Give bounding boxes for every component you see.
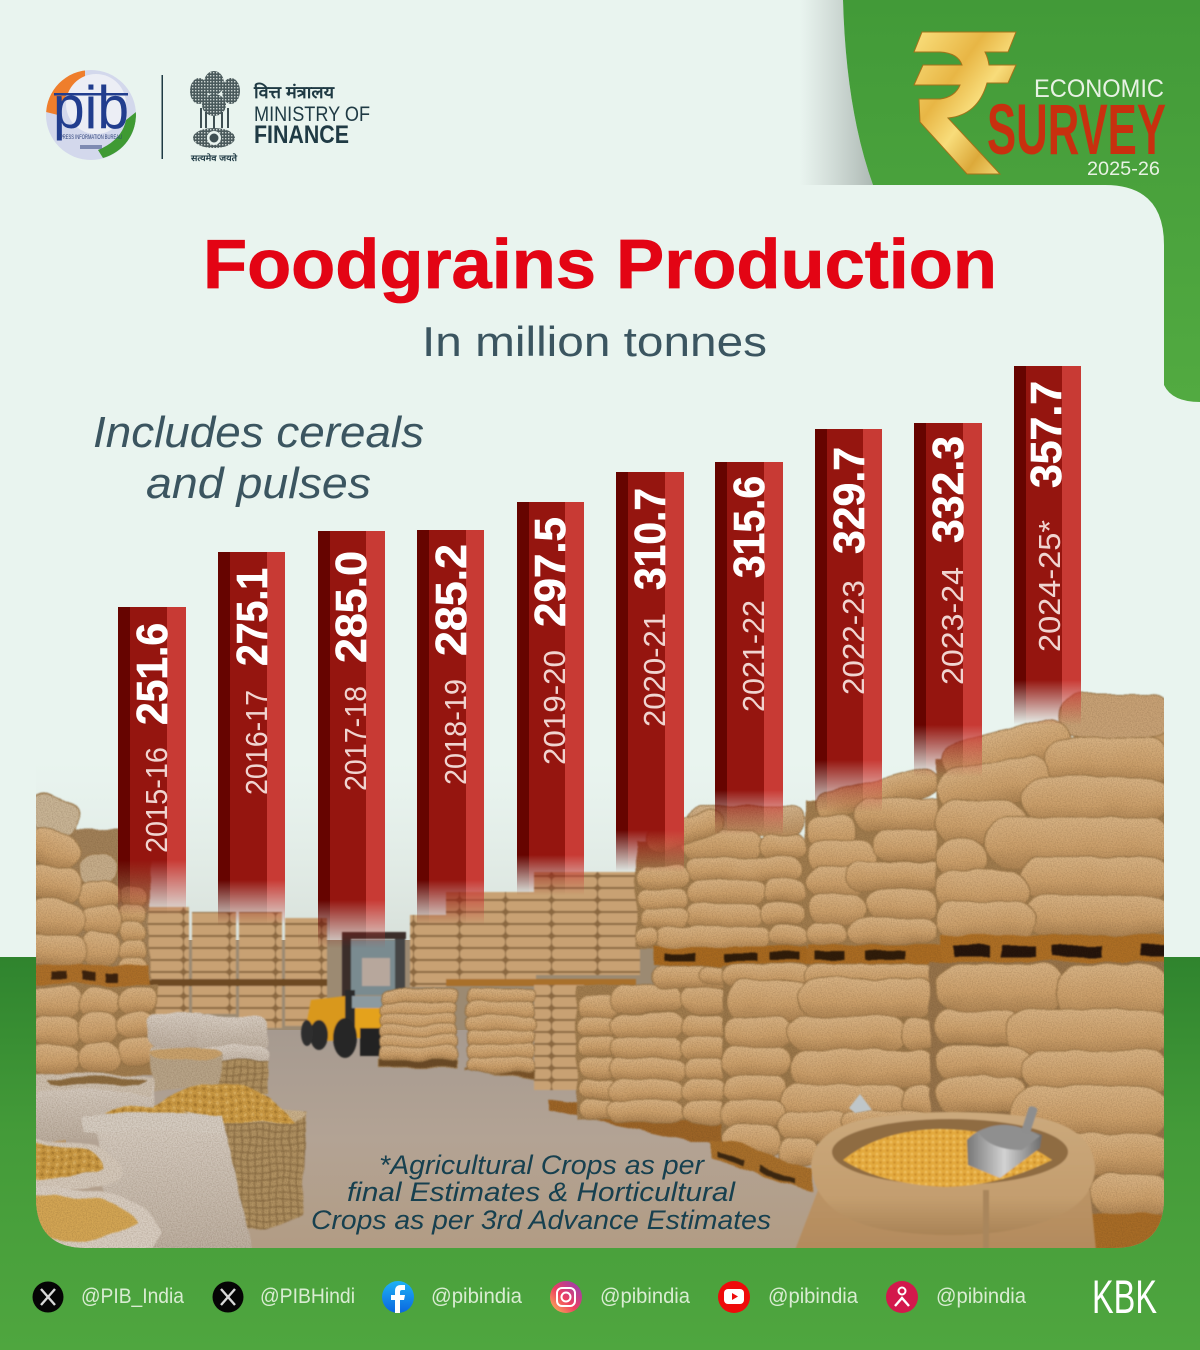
- sack underlay right: [1130, 730, 1164, 1248]
- left big stack: [21, 788, 150, 980]
- bar chart: [118, 366, 1081, 961]
- national emblem: सत्यमेव जयते: [190, 153, 238, 163]
- sack underlay left: [36, 1140, 66, 1246]
- ministry name: FINANCE: [254, 121, 349, 149]
- warehouse photo: [21, 694, 1172, 1256]
- bar values: 332.3: [924, 436, 973, 543]
- bar year labels: 2023-24: [935, 567, 970, 685]
- koo icon: [886, 1281, 918, 1313]
- bar year labels: 2017-18: [338, 686, 373, 791]
- PIB logo: [46, 70, 136, 160]
- bar year labels: 2020-21: [637, 613, 672, 727]
- bottom right pallet: [1091, 1215, 1171, 1251]
- footnote: Crops as per 3rd Advance Estimates: [311, 1205, 771, 1235]
- logo divider: [162, 75, 163, 159]
- side note: and pulses: [146, 459, 371, 508]
- footnote: *Agricultural Crops as per: [379, 1150, 705, 1180]
- stack A lower: [930, 962, 1170, 1222]
- instagram icon: [550, 1281, 582, 1313]
- social handles: @PIBHindi: [260, 1285, 355, 1308]
- footnote: [311, 1150, 771, 1235]
- PIB logo: pib: [53, 74, 129, 141]
- basket with grain: [150, 1084, 307, 1230]
- social handles: [81, 1285, 1026, 1308]
- big front sack with grain and scoop: [795, 1094, 1096, 1250]
- bar values: 285.2: [427, 544, 476, 656]
- wall haze: [150, 853, 635, 940]
- stack beside forklift: [380, 990, 457, 1067]
- grey sacks: [146, 1014, 268, 1094]
- ministry name: MINISTRY OF: [254, 103, 370, 126]
- ministry name: वित्त मंत्रालय: [253, 82, 335, 102]
- left pallet: [30, 965, 148, 985]
- rupee symbol: [914, 32, 1016, 174]
- back right small stacks: [410, 872, 640, 1090]
- white sack with grain: [80, 1106, 252, 1256]
- stack B lower: [722, 964, 936, 1166]
- bar year labels: 2022-23: [836, 580, 871, 695]
- PIB logo: PRESS INFORMATION BUREAU: [60, 134, 122, 141]
- facebook icon: [382, 1281, 414, 1313]
- pallet below front centre stack: [548, 1100, 725, 1142]
- bar year labels: 2018-19: [438, 679, 473, 785]
- pallet A: [940, 935, 1170, 962]
- tab shadow: [812, 0, 873, 185]
- pallet front B: [711, 1140, 812, 1192]
- bar year labels: 2021-22: [736, 600, 771, 712]
- bar values: 310.7: [626, 488, 675, 590]
- far stacks: [146, 907, 327, 1028]
- economic survey badge: [914, 32, 1166, 180]
- warehouse floor: [36, 1030, 1164, 1248]
- bar year labels: 2024-25*: [1032, 520, 1067, 652]
- economic survey badge: ECONOMIC: [1034, 75, 1164, 103]
- bar year labels: 2015-16: [139, 747, 174, 853]
- bottom green band: [0, 957, 1200, 1350]
- social handles: @pibindia: [768, 1285, 858, 1308]
- social handles: @pibindia: [600, 1285, 690, 1308]
- front centre stack: [576, 985, 726, 1123]
- bar year labels: [139, 520, 1067, 853]
- bottom left grain sack front: [36, 1186, 162, 1248]
- KBK mark: KBK: [1092, 1270, 1157, 1323]
- stack A upper: [933, 694, 1172, 940]
- bar values: 329.7: [825, 447, 874, 554]
- economic survey badge: 2025-26: [1087, 159, 1160, 180]
- left lower stack: [30, 985, 156, 1075]
- social handles: @PIB_India: [81, 1285, 184, 1308]
- side note: [93, 408, 424, 508]
- side note: Includes cereals: [93, 408, 424, 457]
- mid stack: [465, 988, 535, 1079]
- stack B upper: [805, 765, 945, 950]
- stack C upper: [636, 806, 808, 950]
- social handles: @pibindia: [431, 1285, 522, 1308]
- bar values: 297.5: [526, 517, 575, 627]
- bar values: 251.6: [128, 623, 177, 725]
- bar values: 315.6: [725, 476, 774, 578]
- social footer: [32, 1270, 1157, 1323]
- left grey sack: [30, 1073, 155, 1140]
- top right green tab: [843, 0, 1200, 402]
- stack below C: [651, 965, 724, 990]
- bar values: 275.1: [228, 568, 277, 666]
- bar year labels: 2019-20: [537, 650, 572, 765]
- social handles: @pibindia: [936, 1285, 1026, 1308]
- subtitle: In million tonnes: [422, 318, 767, 365]
- pallet B: [807, 945, 940, 964]
- forklift: [301, 932, 406, 1058]
- X icon PIB India: [32, 1282, 64, 1312]
- bar values: 285.0: [327, 551, 376, 663]
- X icon PIB Hindi: [212, 1282, 244, 1312]
- dark warehouse depth: [188, 940, 660, 1030]
- pallet C: [655, 947, 807, 966]
- youtube icon: [718, 1281, 750, 1313]
- national emblem: [190, 71, 240, 163]
- bar values: 357.7: [1022, 381, 1071, 488]
- ministry name: [253, 82, 370, 149]
- bar values: [128, 381, 1071, 725]
- bottom left grain sack top: [36, 1138, 121, 1190]
- bar year labels: 2016-17: [239, 690, 274, 795]
- main content card: [36, 185, 1164, 965]
- footnote: final Estimates & Horticultural: [347, 1177, 736, 1207]
- title: Foodgrains Production: [203, 225, 997, 303]
